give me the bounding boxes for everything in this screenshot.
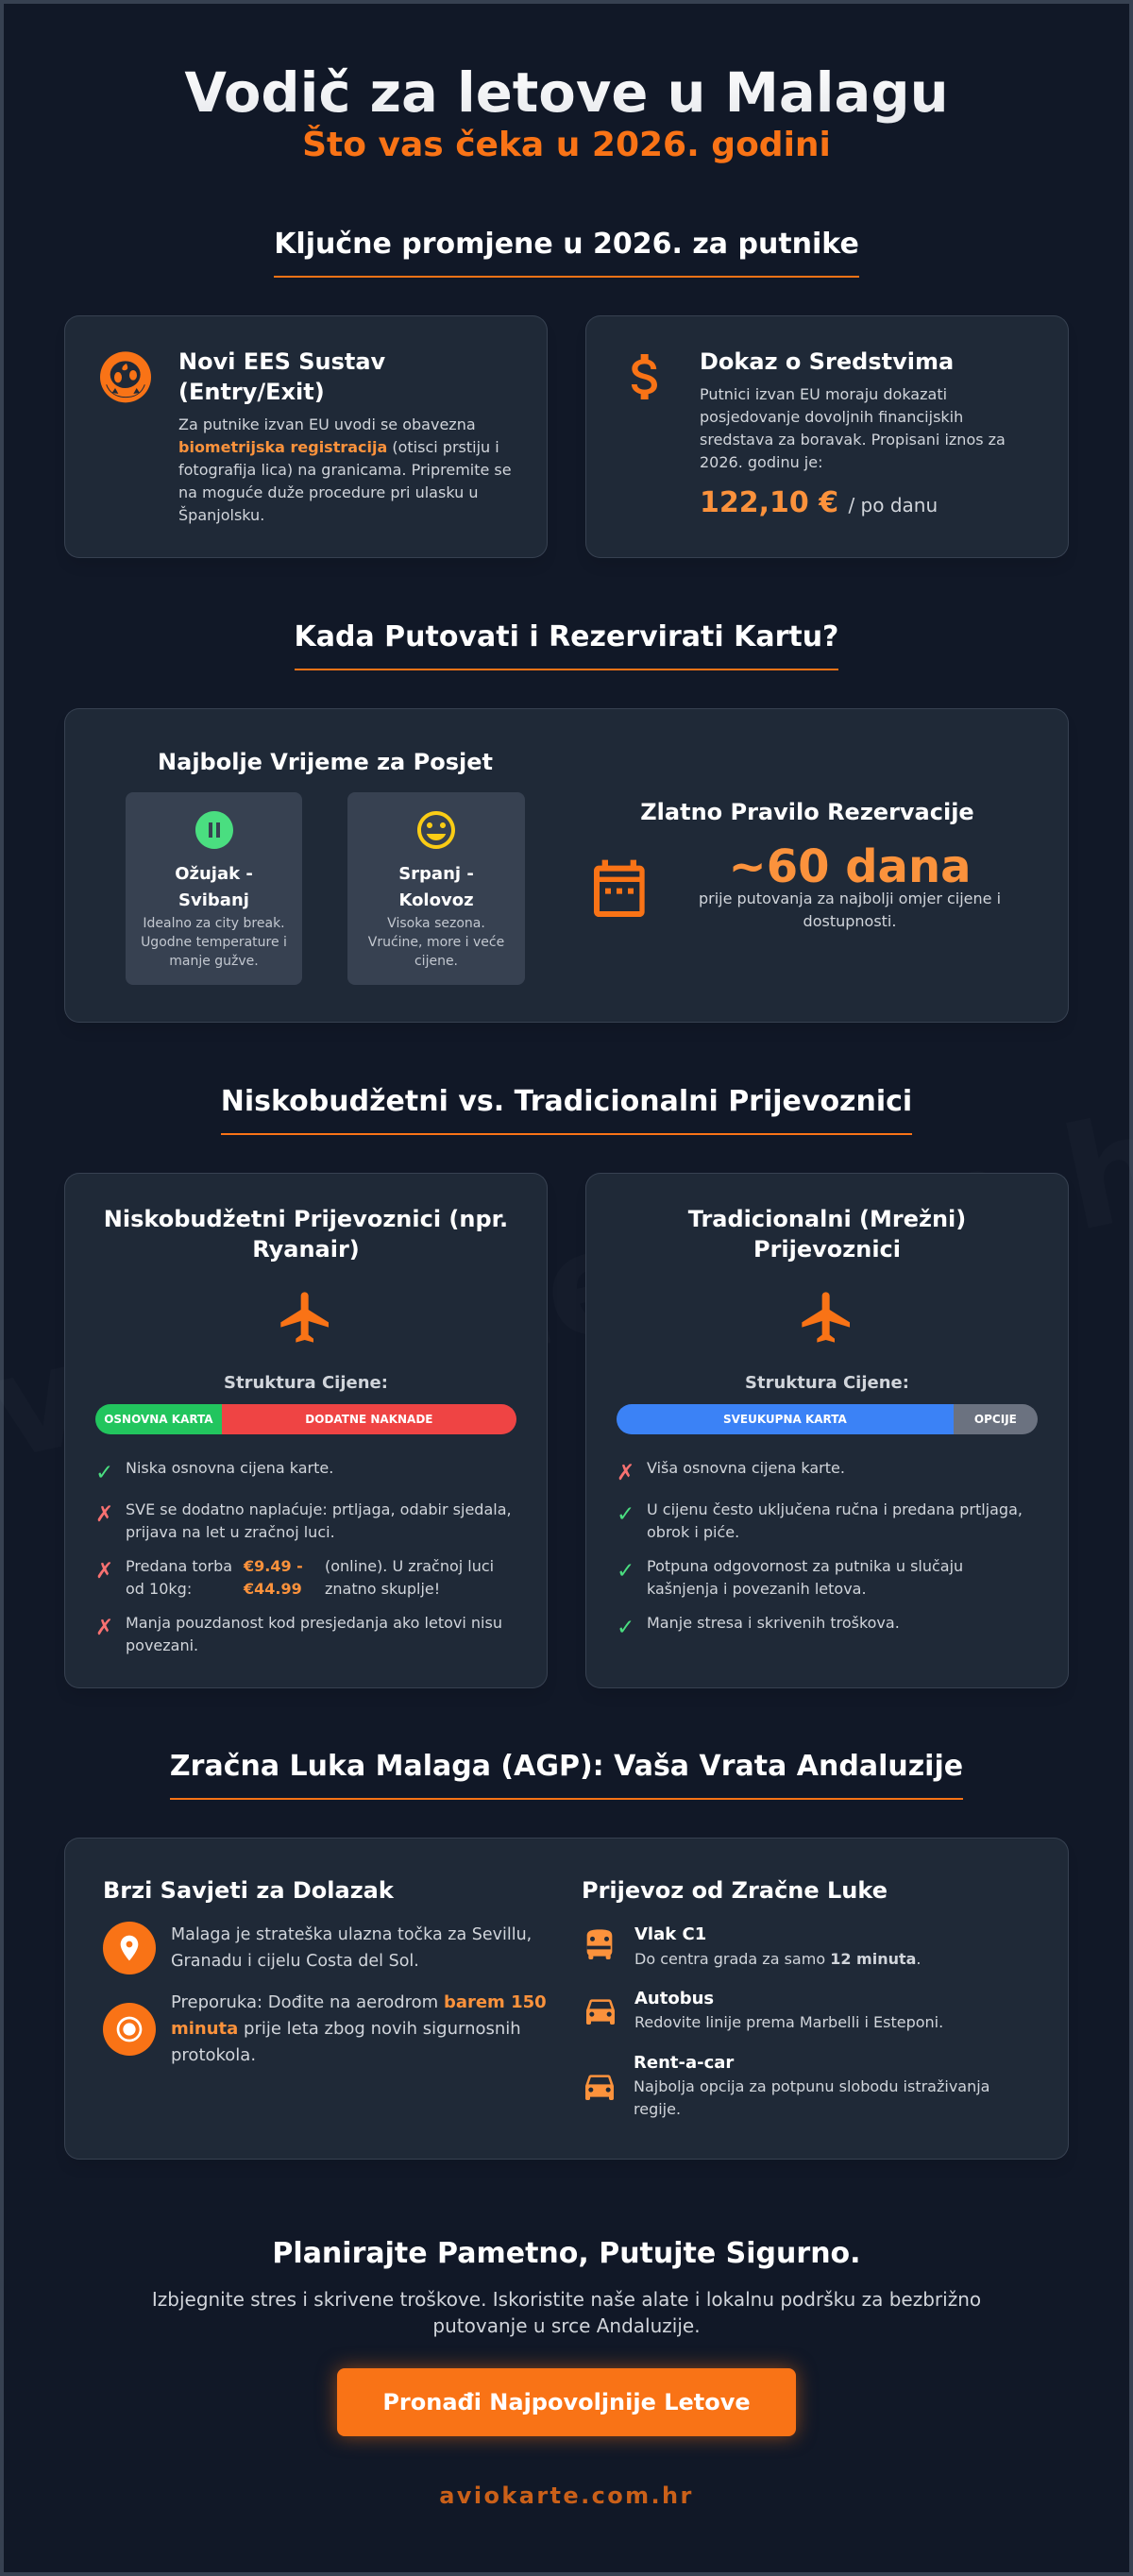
price structure label: Struktura Cijene:: [745, 1373, 909, 1393]
icon: pause circle: [195, 811, 233, 849]
list item: [617, 1614, 900, 1640]
season description: Vrućine, more i veće: [368, 935, 504, 950]
list item: kašnjenja i povezanih letova.: [647, 1580, 867, 1598]
transport: train text: Do centra grada za samo 12 minuta.: [634, 1950, 922, 1968]
transport: car text: Najbolja opcija za potpunu slobodu istraživanja: [634, 2077, 989, 2095]
season name: Ožujak -: [175, 864, 253, 884]
body text: Putnici izvan EU moraju dokazati: [700, 385, 947, 403]
transport: car title: Rent-a-car: [634, 2053, 734, 2073]
season name: [175, 864, 253, 910]
heading: [178, 348, 385, 405]
closing heading: Planirajte Pametno, Putujte Sigurno.: [272, 2237, 861, 2270]
season name: [398, 864, 474, 910]
icon: dollar: [631, 354, 657, 399]
price structure bar: SVEUKUPNA KARTA: [723, 1413, 847, 1426]
season description: manje gužve.: [169, 954, 259, 969]
heading: Tradicionalni (Mrežni): [688, 1206, 966, 1232]
heading: airport: Zračna Luka Malaga (AGP): Vaša Vrata Andaluzije: [170, 1750, 963, 1783]
body text: sredstava za boravak. Propisani iznos za: [700, 431, 1006, 449]
price: 122,10 € / po danu: [700, 486, 938, 519]
panel: airport: [64, 1838, 1069, 2160]
tip text: [171, 1925, 532, 1971]
list item: Manja pouzdanost kod presjedanja ako letovi nisu: [126, 1614, 502, 1632]
price structure label: Struktura Cijene:: [224, 1373, 388, 1393]
icon: check: ✓: [617, 1616, 634, 1640]
stat: 60 days: ~60 dana: [728, 840, 972, 893]
heading: transport: Prijevoz od Zračne Luke: [582, 1877, 888, 1904]
tip text: [171, 1992, 547, 2065]
price structure bar: [95, 1404, 516, 1434]
heading: Niskobudžetni Prijevoznici (npr.: [104, 1206, 508, 1232]
tip text: protokola.: [171, 2045, 256, 2065]
icon: cross: ✗: [95, 1559, 113, 1584]
body text: 2026. godinu je:: [700, 453, 822, 471]
price structure bar: OSNOVNA KARTA: [104, 1413, 213, 1426]
footer brand: aviokarte.com.hr: [439, 2483, 694, 2509]
panel: low-cost carriers: [64, 1173, 548, 1688]
season name: Svibanj: [178, 890, 249, 910]
title: Vodič za letove u Malagu: [184, 61, 949, 125]
call to action button: Pronađi Najpovoljnije Letove: [382, 2389, 751, 2415]
body text: [178, 415, 512, 524]
icon: check: ✓: [617, 1559, 634, 1584]
closing text: putovanje u srce Andaluzije.: [432, 2314, 701, 2337]
transport: train title: Vlak C1: [634, 1924, 706, 1944]
list item: od 10kg:: [126, 1580, 192, 1598]
icon: train: [587, 1929, 612, 1959]
closing text: [152, 2288, 981, 2337]
season card: summer: [347, 792, 525, 985]
list item: [95, 1614, 502, 1654]
season description: [141, 916, 287, 969]
list item: [617, 1557, 963, 1598]
body text: fotografija lica) na granicama. Pripremite se: [178, 461, 512, 479]
body text: Za putnike izvan EU uvodi se obavezna: [178, 415, 476, 433]
stat description: [699, 890, 1001, 930]
list item: €9.49 -: [244, 1557, 303, 1575]
icon: cross: ✗: [617, 1461, 634, 1485]
season card: spring: [126, 792, 302, 985]
icon: calendar: [594, 859, 645, 917]
list item: povezani.: [126, 1636, 198, 1654]
price structure bar: OPCIJE: [974, 1413, 1017, 1426]
heading: (Entry/Exit): [178, 379, 325, 405]
icon: check: ✓: [95, 1461, 113, 1485]
title: [0, 59, 1133, 127]
body text: [700, 385, 1006, 471]
icon: plane: [280, 1292, 329, 1343]
panel: traditional carriers: [585, 1173, 1069, 1688]
season description: [368, 916, 504, 969]
heading: [104, 1206, 508, 1263]
body text: Španjolsku.: [178, 506, 264, 524]
heading: [687, 1206, 966, 1263]
stat description: prije putovanja za najbolji omjer cijene i: [699, 890, 1001, 907]
list item: Niska osnovna cijena karte.: [126, 1459, 333, 1477]
tip text: Preporuka: Dođite na aerodrom barem 150: [171, 1992, 547, 2012]
icon: car: [585, 2075, 614, 2100]
icon: cross: ✗: [95, 1616, 113, 1640]
icon: location pin: [103, 1922, 156, 1974]
list item: [617, 1500, 1023, 1541]
icon: bus: [586, 1999, 615, 2025]
heading: Prijevoznici: [753, 1236, 901, 1263]
heading: best time: Najbolje Vrijeme za Posjet: [158, 749, 493, 775]
list item: (online). U zračnoj luci: [325, 1557, 494, 1575]
list item: [95, 1500, 512, 1541]
list item: prijava na let u zračnoj luci.: [126, 1523, 335, 1541]
list item: [617, 1459, 845, 1485]
icon: plane: [802, 1292, 850, 1343]
heading: when to travel: Kada Putovati i Rezervirati Kartu?: [295, 620, 838, 653]
heading: comparison: Niskobudžetni vs. Tradicionalni Prijevoznici: [221, 1085, 912, 1118]
heading: Ryanair): [252, 1236, 360, 1263]
heading: Novi EES Sustav: [178, 348, 385, 375]
tip text: minuta prije leta zbog novih sigurnosnih: [171, 2019, 521, 2039]
transport: bus text: Redovite linije prema Marbelli i Esteponi.: [634, 2013, 943, 2031]
transport: car text: [634, 2077, 989, 2118]
icon: biometric face: [100, 351, 151, 402]
list item: Viša osnovna cijena karte.: [647, 1459, 845, 1477]
stat description: dostupnosti.: [803, 912, 896, 930]
heading: key changes: Ključne promjene u 2026. za putnike: [274, 228, 859, 261]
price structure bar: [617, 1404, 1038, 1434]
list item: obrok i piće.: [647, 1523, 739, 1541]
icon: smile: [417, 811, 455, 849]
list item: U cijenu često uključena ručna i predana prtljaga,: [647, 1500, 1023, 1518]
list item: Predana torba: [126, 1557, 232, 1575]
price structure bar: DODATNE NAKNADE: [305, 1413, 432, 1426]
tip text: Malaga je strateška ulazna točka za Sevillu,: [171, 1925, 532, 1944]
list item: [95, 1557, 494, 1598]
list item: Manje stresa i skrivenih troškova.: [647, 1614, 900, 1632]
icon: cross: ✗: [95, 1502, 113, 1527]
closing text: Izbjegnite stres i skrivene troškove. Iskoristite naše alate i lokalnu podršku za bezbrižno: [152, 2288, 981, 2311]
season description: Ugodne temperature i: [141, 935, 287, 950]
call to action button: [337, 2368, 796, 2436]
body text: na moguće duže procedure pri ulasku u: [178, 483, 478, 501]
list item: [95, 1459, 333, 1485]
panel: timing: [64, 708, 1069, 1023]
panel: proof of funds: [585, 315, 1069, 558]
heading: arrival tips: Brzi Savjeti za Dolazak: [103, 1877, 394, 1904]
transport: car text: regije.: [634, 2100, 681, 2118]
list item: znatno skuplje!: [325, 1580, 440, 1598]
tip text: Granadu i cijelu Costa del Sol.: [171, 1952, 419, 1971]
season description: Idealno za city break.: [143, 916, 285, 931]
transport: bus title: Autobus: [634, 1989, 714, 2008]
season name: Kolovoz: [398, 890, 474, 910]
season description: cijene.: [414, 954, 458, 969]
list item: Potpuna odgovornost za putnika u slučaju: [647, 1557, 963, 1575]
season name: Srpanj -: [398, 864, 474, 884]
panel: EES system: [64, 315, 548, 558]
list item: SVE se dodatno naplaćuje: prtljaga, odabir sjedala,: [126, 1500, 512, 1518]
icon: check: ✓: [617, 1502, 634, 1527]
icon: target: [103, 2003, 156, 2056]
heading: Dokaz o Sredstvima: [700, 348, 954, 375]
list item: €44.99: [244, 1580, 302, 1598]
body text: biometrijska registracija (otisci prstiju i: [178, 438, 499, 456]
body text: posjedovanje dovoljnih financijskih: [700, 408, 963, 426]
subtitle: Što vas čeka u 2026. godini: [302, 126, 831, 164]
heading: golden rule: Zlatno Pravilo Rezervacije: [640, 799, 974, 825]
season description: Visoka sezona.: [387, 916, 485, 931]
